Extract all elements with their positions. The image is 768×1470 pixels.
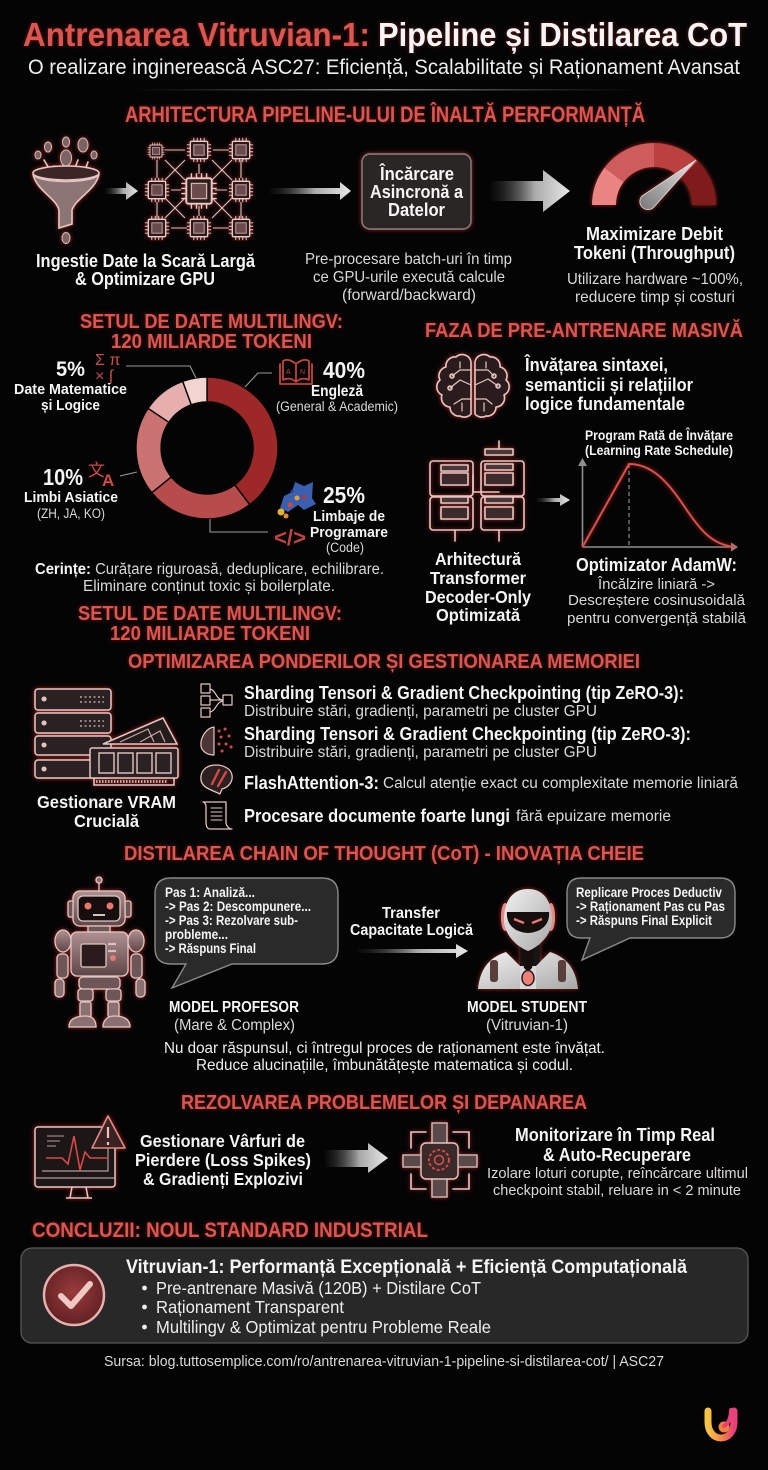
text: loss spikes [135, 1131, 311, 1189]
title [23, 16, 747, 54]
text: distillation explanation [164, 1040, 605, 1074]
heading: troubleshooting: REZOLVAREA PROBLEMELOR ȘI DEPANAREA [181, 1091, 587, 1114]
label: 10% Asian languages: 文 [88, 461, 105, 480]
label: student model: (Vitruvian-1) [486, 1017, 568, 1034]
leader lines [120, 366, 272, 532]
donut chart [136, 377, 278, 519]
text: VRAM label [37, 792, 176, 831]
text: transformer label [425, 549, 531, 625]
icon: auto-recovery gear [403, 1123, 477, 1197]
label: 10% Asian languages [24, 461, 118, 521]
text: preprocessing: (forward/backward) [342, 287, 476, 304]
text: throughput [567, 223, 743, 306]
speech bubble: teacher reasoning: -> Pas 3: Rezolvare sub- [165, 913, 298, 928]
icon: check mark [44, 1265, 104, 1325]
text: FlashAttention: FlashAttention-3: [244, 773, 379, 793]
box: async data loading: Datelor [388, 200, 445, 220]
bullet list [142, 1278, 491, 1337]
text: transformer label: Arhitectură [435, 549, 521, 569]
text: loss spikes: & Gradienți Explozivi [143, 1169, 303, 1189]
speech bubble: teacher reasoning [155, 878, 338, 988]
text: loss spikes: Gestionare Vârfuri de [140, 1131, 305, 1151]
icon: monitor with warning [35, 1116, 125, 1198]
speech bubble: teacher reasoning: -> Pas 2: Descompunere... [165, 899, 311, 914]
label: 25% programming languages: (Code) [326, 540, 364, 555]
arrow: funnel to chips [105, 182, 138, 200]
label: 10% Asian languages: A [102, 471, 114, 490]
icon: transformer architecture [430, 441, 524, 541]
text: sharding 1: Sharding Tensori & Gradient Checkpointing (tip ZeRO-3): [244, 683, 684, 703]
heading: dataset repeated [78, 603, 342, 645]
text: real-time monitoring: Izolare loturi corupte, reîncărcare ultimul [487, 1165, 748, 1182]
box: async data loading: Încărcare [379, 163, 454, 184]
icon: scroll document [203, 802, 232, 829]
text: large-scale ingestion: & Optimizare GPU [75, 268, 215, 289]
text: logic transfer: Transfer [382, 905, 440, 922]
bullet list: Pre-antrenare Masivă (120B) + Distilare CoT [156, 1278, 481, 1298]
text: real-time monitoring [487, 1125, 748, 1199]
text: FlashAttention [244, 773, 738, 793]
icon: data funnel [33, 137, 99, 244]
text: preprocessing [305, 251, 512, 304]
text: distillation explanation: Nu doar răspunsul, ci întregul proces de raționament este învățat. [164, 1040, 605, 1057]
text: preprocessing: Pre-procesare batch-uri în timp [305, 251, 512, 268]
source line: Sursa: blog.tuttosemplice.com/ro/antrenarea-vitruvian-1-pipeline-si-distilarea-cot/ | ASC27 [104, 1353, 664, 1370]
text: AdamW optimizer: Descreștere cosinusoidală [568, 592, 746, 609]
icon: teacher robot [55, 877, 145, 1027]
text: syntax and semantics learning: semanticii și relațiilor [525, 375, 693, 395]
label: 10% Asian languages: Limbi Asiatice [24, 489, 118, 506]
text: logic transfer: Capacitate Logică [350, 922, 473, 939]
label: student model [467, 999, 587, 1034]
icon: brain with lightning [201, 765, 232, 794]
bullet list: Multilingv & Optimizat pentru Probleme Reale [156, 1317, 491, 1337]
speech bubble: student reasoning: -> Raționament Pas cu Pas [576, 899, 725, 914]
chart: learning rate schedule: (Learning Rate Schedule) [585, 443, 733, 458]
icon: server and RAM [35, 689, 178, 785]
text: sharding 1 [244, 683, 684, 720]
icon: brain with particles [201, 727, 231, 755]
heading: weights and memory: OPTIMIZAREA PONDERILOR ȘI GESTIONAREA MEMORIEI [128, 650, 640, 673]
chart: learning rate schedule: Program Rată de Învățare [585, 428, 733, 443]
text: throughput: Utilizare hardware ~100%, [567, 271, 743, 288]
text: throughput: Tokeni (Throughput) [574, 242, 735, 263]
text: logic transfer [350, 905, 473, 939]
label: 25% programming languages: Programare [310, 524, 388, 541]
title: Antrenarea Vitruvian-1: [23, 16, 370, 53]
text: real-time monitoring: & Auto-Recuperare [543, 1145, 691, 1165]
text: data requirements [35, 561, 384, 595]
text: real-time monitoring: Monitorizare în Timp Real [515, 1125, 715, 1145]
text: transformer label: Decoder-Only [425, 587, 531, 607]
arrow: transformer to chart [536, 494, 570, 506]
text: AdamW optimizer [567, 555, 747, 627]
icon: throughput gauge [592, 143, 716, 210]
panel: conclusions [21, 1248, 748, 1343]
speech bubble: teacher reasoning: Pas 1: Analiză... [165, 885, 255, 900]
text: real-time monitoring: checkpoint stabil, reluare in < 2 minute [493, 1182, 741, 1199]
text: syntax and semantics learning [524, 354, 693, 414]
text: sharding 2 [244, 724, 691, 761]
text: FlashAttention: Calcul atenție exact cu complexitate memorie liniară [383, 775, 738, 792]
label: 25% programming languages: </> [274, 525, 306, 550]
icon: tensor sharding [201, 684, 232, 717]
text: preprocessing: ce GPU-urile execută calcule [313, 269, 505, 286]
panel heading: Vitruvian-1: Performanță Excepțională + Eficiență Computațională [126, 1257, 687, 1278]
speech bubble: teacher reasoning: probleme... [165, 927, 228, 942]
box: async data loading [362, 154, 471, 229]
label: 5% math: × ∫ [95, 368, 115, 385]
speech bubble: teacher reasoning: -> Răspuns Final [165, 941, 256, 956]
text: AdamW optimizer: Încălzire liniară -> [597, 576, 715, 593]
heading: conclusions: CONCLUZII: NOUL STANDARD INDUSTRIAL [32, 1219, 428, 1242]
label: teacher model [169, 999, 299, 1034]
label: 5% math: și Logice [41, 397, 100, 414]
text: distillation explanation: Reduce alucinațiile, îmbunătățește matematica și codul. [196, 1057, 573, 1074]
speech bubble: student reasoning [567, 878, 735, 960]
text: long documents [244, 806, 671, 826]
bullet list: Raționament Transparent [156, 1297, 344, 1317]
label: 25% programming languages: Limbaje de [313, 508, 385, 525]
heading: multilingual dataset: 120 MILIARDE TOKENI [111, 331, 312, 353]
arrow: spikes to monitoring [325, 1143, 388, 1173]
label: teacher model: MODEL PROFESOR [169, 999, 299, 1016]
text: sharding 1: Distribuire stări, gradienți, parametri pe cluster GPU [244, 703, 597, 720]
text: VRAM label: Crucială [74, 811, 139, 831]
text: transformer label: Transformer [430, 568, 526, 588]
label: 40% English: (General & Academic) [276, 399, 398, 414]
label: 40% English: N [300, 369, 305, 376]
icon: student robot [478, 889, 578, 989]
icon: logo [708, 1410, 734, 1438]
text: long documents: fără epuizare memorie [516, 808, 671, 825]
label: 5% math: Date Matematice [14, 381, 127, 398]
arrow: async box to gauge [491, 170, 570, 212]
text: sharding 2: Distribuire stări, gradienți, parametri pe cluster GPU [244, 744, 597, 761]
speech bubble: student reasoning: -> Răspuns Final Explicit [576, 913, 712, 928]
text: VRAM label: Gestionare VRAM [37, 792, 176, 812]
label: teacher model: (Mare & Complex) [174, 1017, 295, 1034]
text: data requirements: Eliminare conținut toxic și boilerplate. [83, 578, 335, 595]
text: AdamW optimizer: pentru convergență stabilă [567, 610, 747, 627]
arrow: teacher to student [357, 944, 468, 958]
text: syntax and semantics learning: Învățarea sintaxei, [524, 354, 668, 375]
text: large-scale ingestion [36, 250, 256, 289]
icon: brain [437, 355, 509, 417]
heading: multilingual dataset [80, 311, 343, 353]
heading: dataset repeated: 120 MILIARDE TOKENI [110, 623, 310, 645]
label: student model: MODEL STUDENT [467, 999, 587, 1016]
heading: CoT distillation: DISTILAREA CHAIN OF THOUGHT (CoT) - INOVAȚIA CHEIE [124, 842, 644, 865]
arrow: chips to async box [270, 182, 351, 200]
heading: dataset repeated: SETUL DE DATE MULTILINGV: [78, 603, 342, 625]
title: Pipeline și Distilarea CoT [378, 16, 747, 54]
text: throughput: reducere timp și costuri [575, 289, 735, 306]
heading: pre-training phase: FAZA DE PRE-ANTRENARE MASIVĂ [425, 319, 743, 342]
text: large-scale ingestion: Ingestie Date la Scară Largă [36, 250, 256, 271]
label: 40% English: A [286, 369, 291, 376]
chart: learning rate schedule [578, 428, 738, 552]
label: 25% programming languages: 25% [323, 482, 365, 508]
text: throughput: Maximizare Debit [586, 223, 723, 244]
label: 40% English [276, 357, 398, 414]
text: sharding 2: Sharding Tensori & Gradient Checkpointing (tip ZeRO-3): [244, 724, 691, 744]
label: 5% math [14, 352, 127, 414]
label: 10% Asian languages: 10% [43, 464, 83, 490]
subtitle: O realizare inginerească ASC27: Eficiență, Scalabilitate și Raționament Avansat [28, 56, 740, 79]
text: data requirements: Cerințe: Curățare riguroasă, deduplicare, echilibrare. [35, 561, 384, 578]
heading: multilingual dataset: SETUL DE DATE MULTILINGV: [80, 311, 343, 333]
text: syntax and semantics learning: logice fundamentale [525, 394, 685, 414]
text: loss spikes: Pierdere (Loss Spikes) [135, 1150, 311, 1170]
label: 25% programming languages [274, 482, 388, 555]
label: 5% math: Σ π [95, 352, 120, 369]
text: transformer label: Optimizată [436, 605, 520, 625]
label: 5% math: 5% [56, 358, 85, 381]
box: async data loading: Asincronă a [370, 182, 464, 202]
icon: GPU chip network [145, 138, 253, 240]
label: 40% English: 40% [323, 357, 365, 383]
text: long documents: Procesare documente foarte lungi [244, 806, 510, 826]
label: 40% English: Engleză [311, 383, 363, 400]
speech bubble: student reasoning: Replicare Proces Deductiv [576, 885, 722, 900]
heading: pipeline architecture: ARHITECTURA PIPELINE-ULUI DE ÎNALTĂ PERFORMANȚĂ [125, 102, 645, 127]
text: AdamW optimizer: Optimizator AdamW: [576, 555, 737, 575]
label: 10% Asian languages: (ZH, JA, KO) [37, 506, 105, 521]
